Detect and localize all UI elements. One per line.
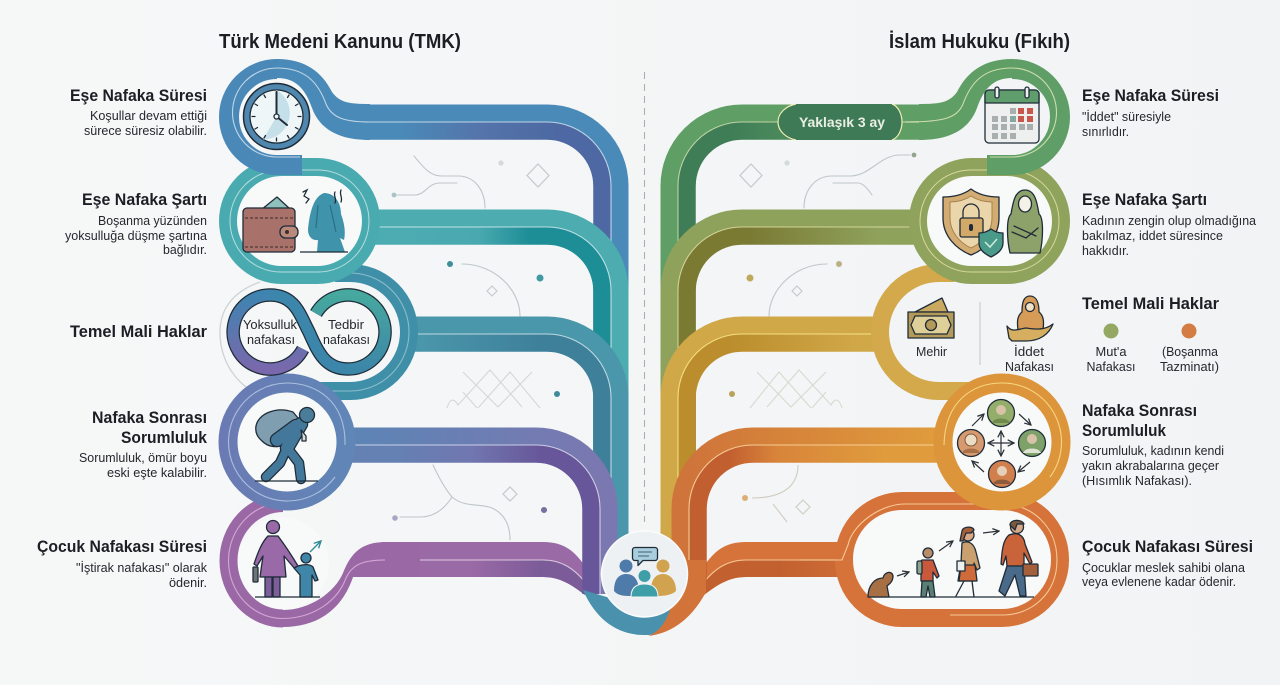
left label: Eşe Nafaka Şartı: Eşe Nafaka Şartı bbox=[82, 190, 207, 209]
left label: Çocuk Nafakası Süresi: ödenir. bbox=[169, 575, 207, 590]
icon: open hand holding veiled figure bbox=[1007, 296, 1053, 341]
right ring 4 orange-gold bbox=[943, 383, 1062, 501]
title: Türk Medeni Kanunu: Türk Medeni Kanunu (TMK) bbox=[219, 31, 461, 53]
track 3 blue-teal bbox=[405, 334, 611, 560]
adult man bbox=[999, 520, 1038, 596]
speech bubble bbox=[632, 548, 658, 566]
icon: money (Mehir) bbox=[908, 298, 954, 338]
right label: Eşe Nafaka Şartı: Eşe Nafaka Şartı bbox=[1082, 190, 1207, 209]
right label: Nafaka Sonrası Sorumluluk: yakın akrabalarına geçer bbox=[1082, 458, 1220, 473]
divider between Mehir and İddet bbox=[979, 302, 981, 365]
bottom relative bbox=[988, 460, 1016, 488]
right label: Çocuk Nafakası Süresi: veya evlenene kadar ödenir. bbox=[1082, 574, 1236, 589]
person right bbox=[651, 560, 676, 596]
icon: clock bbox=[244, 84, 310, 150]
center dashed divider bbox=[644, 72, 646, 522]
left label: Nafaka Sonrası Sorumluluk bbox=[79, 408, 207, 480]
left ring 4 violet bbox=[228, 383, 346, 501]
right ring 3 yellow bbox=[880, 273, 980, 391]
right label: Çocuk Nafakası Süresi: Çocuk Nafakası Süresi bbox=[1082, 537, 1253, 556]
track 4 orange-gold bbox=[689, 445, 944, 590]
track 5 orange bbox=[704, 542, 904, 595]
label: İddet Nafakası: Nafakası bbox=[1005, 359, 1054, 374]
right label: Nafaka Sonrası Sorumluluk: Sorumluluk, kadının kendi bbox=[1082, 443, 1224, 458]
track 5 purple bbox=[385, 542, 585, 595]
legend: Mut'a Nafakası bbox=[1086, 324, 1136, 374]
legend: Boşanma Tazminatı: Tazminatı) bbox=[1160, 359, 1219, 374]
right relative bbox=[1018, 430, 1046, 456]
label: İddet Nafakası bbox=[1005, 344, 1054, 374]
person middle bbox=[631, 570, 658, 597]
puppy bbox=[868, 572, 893, 597]
label: Mehir: Mehir bbox=[916, 344, 948, 359]
label: Yoksulluk nafakası: Yoksulluk bbox=[243, 317, 297, 332]
label: Tedbir nafakası: nafakası bbox=[323, 332, 370, 347]
left bottom crescent bbox=[583, 590, 672, 635]
track 1 blue bbox=[368, 122, 611, 560]
left label: Eşe Nafaka Süresi: sürece süresiz olabilir. bbox=[84, 123, 207, 138]
left label: Temel Mali Haklar: Temel Mali Haklar bbox=[70, 322, 207, 341]
right loop bbox=[316, 295, 385, 369]
right tracks: İslam Hukuku (mirrored) bbox=[678, 122, 944, 595]
left label: Eşe Nafaka Süresi: Eşe Nafaka Süresi bbox=[70, 86, 207, 105]
left tracks: Türk Medeni Kanunu bbox=[345, 122, 611, 595]
right background line ornaments bbox=[729, 153, 916, 522]
left label: Nafaka Sonrası Sorumluluk: Sorumluluk bbox=[121, 428, 207, 447]
pill: Yaklaşık 3 ay bbox=[778, 104, 902, 140]
left ring 5 purple bbox=[228, 503, 420, 627]
left label: Çocuk Nafakası Süresi bbox=[37, 537, 207, 590]
icon: calendar bbox=[985, 87, 1039, 143]
right label: Eşe Nafaka Süresi: sınırlıdır. bbox=[1082, 124, 1129, 139]
right ring 2 olive bbox=[918, 167, 1061, 275]
top relative bbox=[988, 400, 1014, 426]
right label: Çocuk Nafakası Süresi bbox=[1082, 537, 1253, 589]
title: İslam Hukuku: İslam Hukuku (Fıkıh) bbox=[889, 30, 1070, 53]
right label: Eşe Nafaka Süresi bbox=[1082, 86, 1219, 139]
stage arrows bbox=[897, 531, 999, 576]
label: Yoksulluk nafakası: nafakası bbox=[247, 332, 295, 347]
label: Tedbir nafakası: Tedbir bbox=[328, 317, 365, 332]
left label: Nafaka Sonrası Sorumluluk: eski eşte kalabilir. bbox=[107, 465, 207, 480]
right label: Eşe Nafaka Süresi: "İddet" süresiyle bbox=[1082, 109, 1171, 124]
track 3 yellow bbox=[678, 334, 884, 560]
legend: Mut'a Nafakası: Mut'a bbox=[1096, 344, 1127, 359]
infinity loop: Yoksulluk and Tedbir nafakası bbox=[233, 295, 385, 369]
track 2 olive bbox=[678, 227, 914, 560]
left label: Eşe Nafaka Süresi bbox=[70, 86, 207, 138]
left label: Nafaka Sonrası Sorumluluk: Nafaka Sonrası bbox=[92, 408, 207, 427]
track 1 green bbox=[678, 122, 921, 560]
left ring 3 blue-teal bbox=[220, 273, 409, 396]
right label: Eşe Nafaka Şartı: Kadının zengin olup olmadığına bbox=[1082, 213, 1257, 228]
right ring 5 orange bbox=[800, 501, 1060, 618]
label: Yoksulluk nafakası bbox=[243, 317, 297, 347]
icon: man carrying sack bbox=[255, 408, 318, 481]
right label: Nafaka Sonrası Sorumluluk: (Hısımlık Nafakası). bbox=[1082, 473, 1192, 488]
icon: relatives network bbox=[958, 400, 1046, 488]
left label: Eşe Nafaka Şartı: yoksulluğa düşme şartına bbox=[65, 228, 208, 243]
track 4 violet bbox=[345, 445, 600, 594]
icon: growth from infant to adult bbox=[868, 520, 1038, 597]
person left bbox=[614, 560, 639, 596]
right label: Eşe Nafaka Şartı: bakılmaz, iddet süresince bbox=[1082, 228, 1223, 243]
left label: Eşe Nafaka Süresi: Koşullar devam ettiği bbox=[90, 108, 207, 123]
left ring 1 blue bbox=[229, 59, 370, 165]
left background line ornaments bbox=[392, 156, 560, 540]
right label: Eşe Nafaka Süresi: Eşe Nafaka Süresi bbox=[1082, 86, 1219, 105]
left label: Çocuk Nafakası Süresi: "İştirak nafakası" olarak bbox=[76, 560, 207, 575]
right label: Eşe Nafaka Şartı bbox=[1082, 190, 1257, 258]
right label: Nafaka Sonrası Sorumluluk: Nafaka Sonrası bbox=[1082, 401, 1197, 420]
pill: Yaklaşık 3 ay: Yaklaşık 3 ay bbox=[799, 114, 885, 130]
right label: Nafaka Sonrası Sorumluluk: Sorumluluk bbox=[1082, 421, 1166, 440]
child bbox=[917, 548, 939, 597]
left label: Nafaka Sonrası Sorumluluk: Sorumluluk, ömür boyu bbox=[79, 450, 207, 465]
label: İddet Nafakası: İddet bbox=[1014, 344, 1044, 359]
left ring 2 teal bbox=[228, 167, 371, 275]
left label: Çocuk Nafakası Süresi: Çocuk Nafakası Süresi bbox=[37, 537, 207, 556]
legend: Boşanma Tazminatı bbox=[1160, 324, 1219, 374]
left label: Eşe Nafaka Şartı: Boşanma yüzünden bbox=[98, 213, 207, 228]
left label: Eşe Nafaka Şartı bbox=[65, 190, 208, 257]
label: Tedbir nafakası bbox=[323, 317, 370, 347]
icon: wallet and distressed woman bbox=[243, 190, 348, 252]
legend: Boşanma Tazminatı: (Boşanma bbox=[1162, 344, 1219, 359]
left label: Eşe Nafaka Şartı: bağlıdır. bbox=[163, 242, 207, 257]
icon: shield with lock and veiled woman bbox=[943, 189, 1042, 257]
young woman bbox=[956, 527, 980, 597]
right ring 1 green bbox=[905, 59, 1060, 165]
right label: Çocuk Nafakası Süresi: Çocuklar meslek sahibi olana bbox=[1082, 560, 1246, 575]
arrows bbox=[972, 414, 1031, 472]
center circle with people bbox=[602, 531, 688, 617]
left loop bbox=[233, 295, 303, 369]
crossing band bbox=[270, 295, 348, 369]
right label: Temel Mali Haklar: Temel Mali Haklar bbox=[1082, 294, 1219, 313]
icon: mother and child bbox=[253, 520, 321, 597]
legend: Mut'a Nafakası: Nafakası bbox=[1086, 359, 1136, 374]
right label: Eşe Nafaka Şartı: hakkıdır. bbox=[1082, 243, 1129, 258]
track 2 teal bbox=[375, 227, 611, 560]
right label: Nafaka Sonrası Sorumluluk bbox=[1082, 401, 1224, 488]
right bottom crescent bbox=[648, 560, 706, 636]
left relative bbox=[958, 430, 984, 456]
